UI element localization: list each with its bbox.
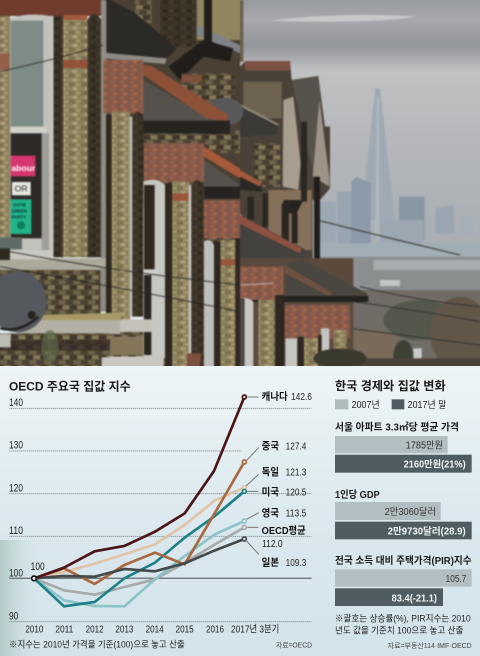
sign: labour: abour [11,163,36,173]
group: GDP per capita: 2만9730달러(28.9) [388,526,466,538]
series labels: 121.3 [286,468,307,479]
sign: vote green party: VOTE [13,203,27,209]
legend: 2007년 [352,400,380,411]
piers of first bay [53,16,63,257]
series labels: OECD평균 [262,525,306,537]
y-axis labels: 110 [9,525,23,537]
gridlines [9,408,312,622]
wires [0,45,240,312]
hazy neighbourhood [320,257,480,297]
photo: terraced brick houses with London skyline [0,0,480,373]
third bay arch [144,143,204,182]
series labels: 112.0 [262,539,283,550]
chart panel: OECD house price index [9,379,312,650]
group: PIR index: 전국 소득 대비 주택가격(PIR)지수 [335,554,472,567]
line: Germany [34,488,244,578]
series labels [262,390,312,569]
y-axis labels: 140 [9,397,23,409]
sign: or: OR [15,184,28,194]
panel background [0,366,480,656]
roof 1 [103,0,177,58]
x-axis labels: 2012 [86,625,104,636]
sign: vote green party: GREEN [12,209,27,214]
y-axis labels [9,397,45,622]
wires [317,220,480,345]
line: USA [34,491,244,606]
line: UK [34,521,244,606]
group: PIR index: 83.4(-21.1) [392,593,437,604]
series labels: 중국 [262,440,279,452]
legend [335,399,446,411]
x-axis labels [25,624,279,636]
lower roofs [240,215,308,262]
group: Seoul apartment price: 서울 아파트 3.3㎡당 평균 가격 [335,420,459,433]
side panel title: 한국 경제와 집값 변화 [335,378,446,393]
source: 자료=부동산114·IMF·OECD [388,641,472,650]
y-axis labels: 130 [9,440,23,452]
first bay top arch [0,0,103,16]
series labels: 일본 [262,556,279,569]
x-axis labels: 2013 [115,625,134,636]
chart title: OECD 주요국 집값 지수 [9,379,131,393]
sign: or [12,182,31,195]
series labels: 독일 [262,466,279,479]
source: 자료=OECD [276,641,312,650]
group: PIR index [335,554,472,606]
window 2 [143,180,165,358]
line: China [34,462,244,584]
series labels: 109.3 [286,558,307,569]
group: GDP per capita [335,488,472,539]
series labels: 캐나다 [262,390,288,403]
roof 3 [204,160,240,188]
satellite dish [0,271,47,347]
sky and distant city [160,0,480,373]
sign: labour [11,156,36,176]
fourth bay [204,200,240,240]
y-axis labels: 100 [31,561,45,573]
x-axis labels: 2011 [55,625,74,636]
foreground houses [0,0,243,370]
series labels: 120.5 [286,487,307,498]
series labels: 127.4 [286,441,307,452]
lower first bay brick [0,270,101,315]
sign: vote green party [11,199,31,234]
corner mist [0,540,45,656]
y-axis labels: 90 [9,610,18,622]
series labels: 142.6 [291,392,312,403]
y-axis labels: 100 [9,568,23,580]
group: GDP per capita: 1인당 GDP [335,488,380,501]
sign: vote green party: PARTY [12,214,26,219]
x-axis labels: 2016 [206,625,224,636]
group: Seoul apartment price: 2160만원(21%) [404,459,466,471]
line end markers [32,395,246,581]
note: 년도 값을 기준치 100으로 놓고 산출 [335,624,464,635]
group: GDP per capita: 2만3060달러 [385,506,436,518]
bottom brick [0,333,110,370]
series labels: 113.5 [286,508,307,519]
group: Seoul apartment price [335,420,472,473]
note [335,613,471,635]
line: OECD average [34,527,244,595]
line: Canada [34,397,244,578]
note: ※괄호는 상승률(%), PIR지수는 2010 [335,613,471,624]
series labels: 미국 [262,485,279,498]
group: Seoul apartment price: 1785만원 [406,441,443,452]
distant towers [365,88,395,220]
far left pier [0,0,10,260]
line: Japan [34,539,244,578]
x-axis labels: 2014 [146,625,164,636]
series labels: 영국 [262,506,279,519]
roof 2 [143,80,230,133]
second bay [103,60,143,113]
far houses [239,0,243,62]
leader lines [246,397,259,554]
group: PIR index: 105.7 [446,574,466,585]
x-axis labels: 2010 [25,625,44,636]
legend: 2017년 말 [408,399,446,411]
y-axis labels: 120 [9,482,23,494]
upper background houses [103,0,240,207]
sills [110,319,152,332]
x-axis labels: 2015 [176,625,194,636]
x-axis labels: 2017년 3분기 [231,624,279,636]
footnote: ※지수는 2010년 가격을 기준(100)으로 놓고 산출 [9,639,185,650]
window 1 frame [10,15,53,257]
side panel: Korean economy and house prices [335,378,472,650]
